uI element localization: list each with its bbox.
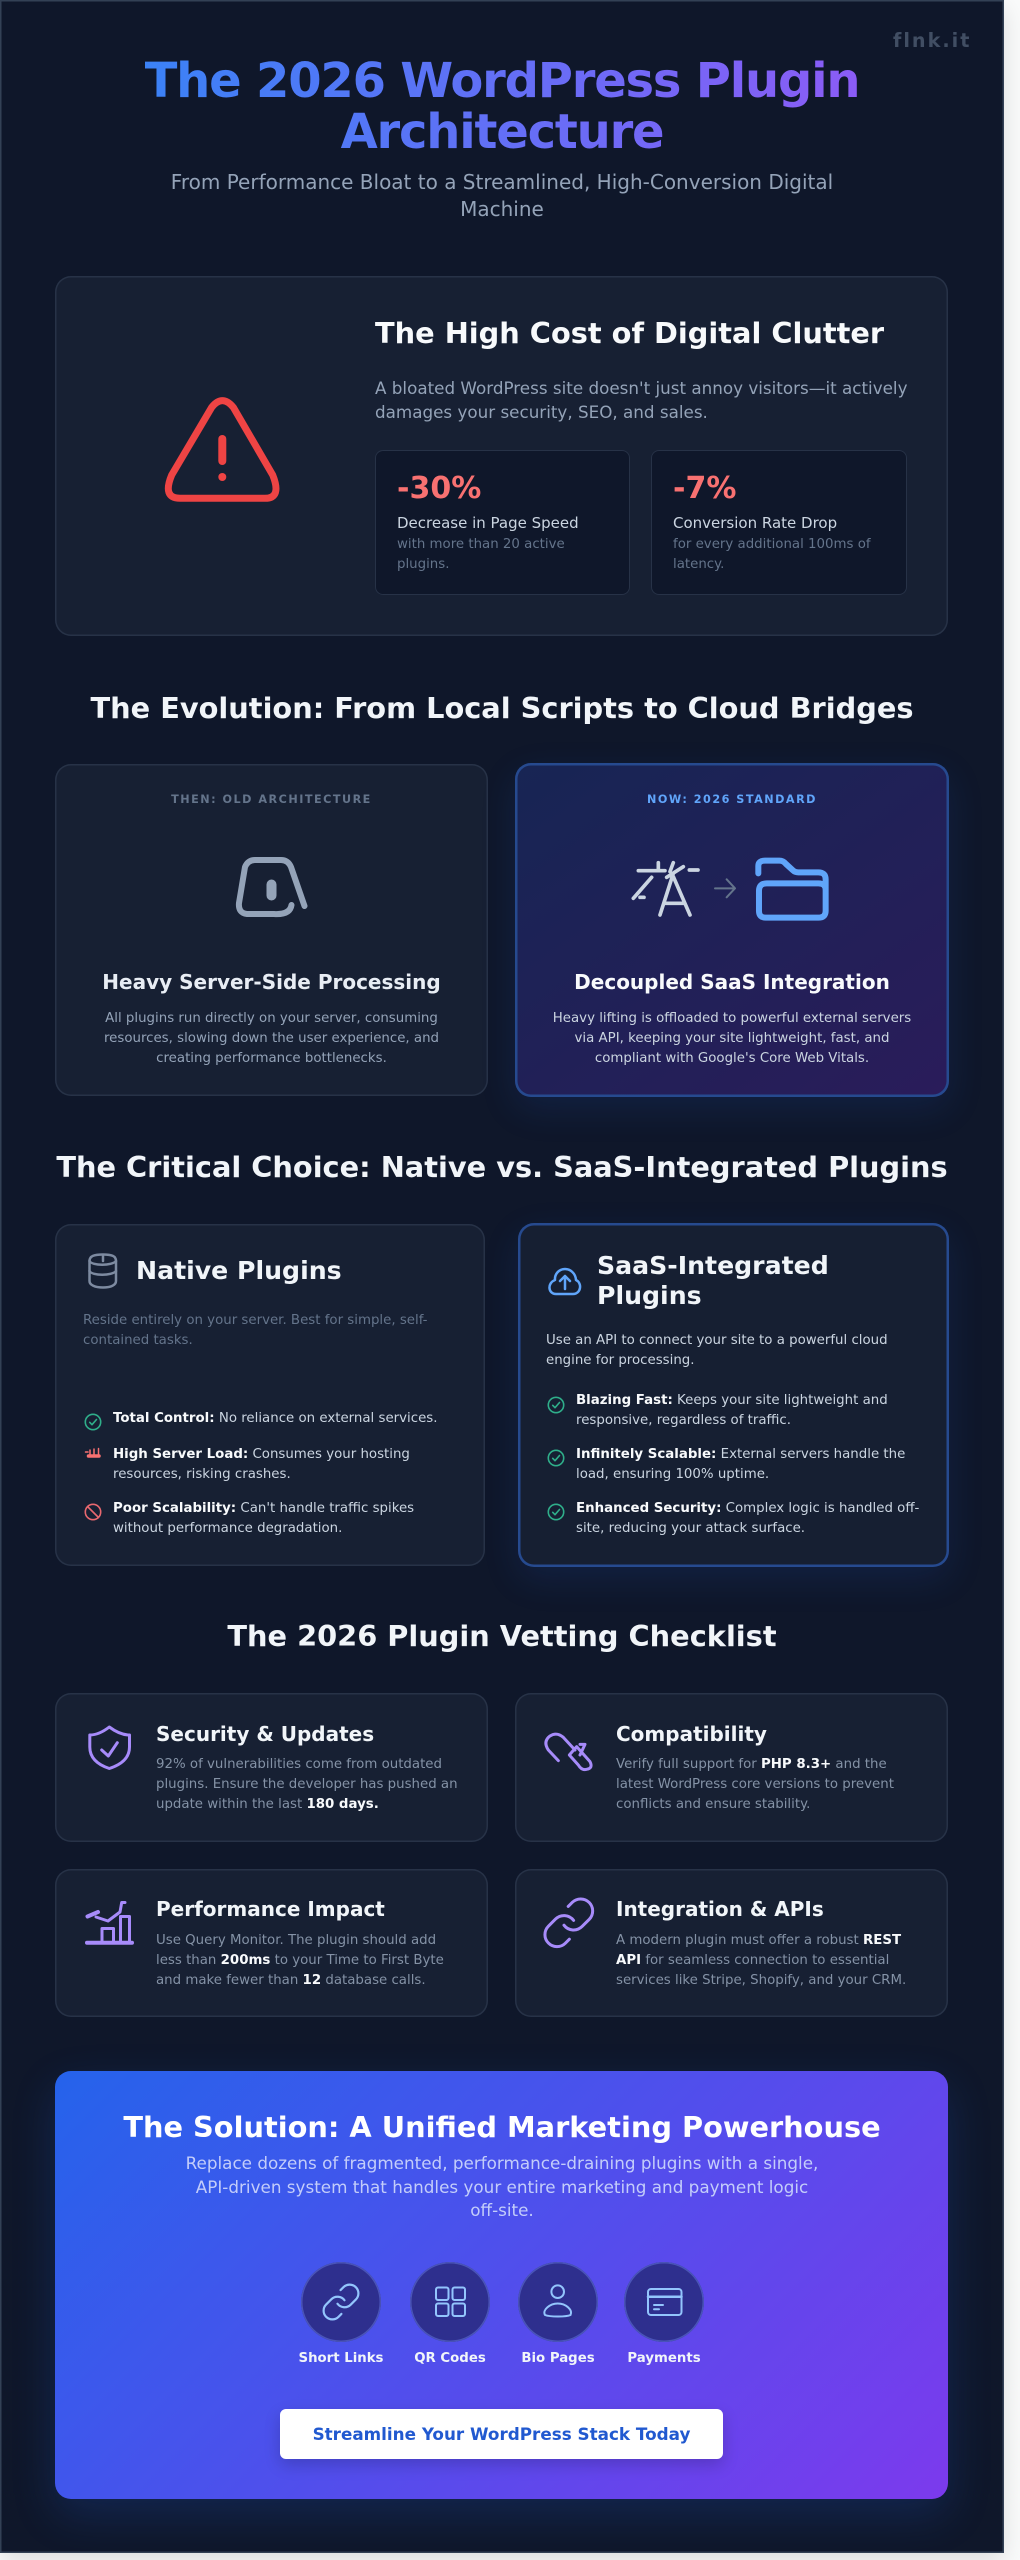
card title: Security & Updates bbox=[156, 1722, 374, 1746]
button: call to action: Streamline Your WordPress Stack Today bbox=[313, 2424, 690, 2444]
icon: server load bbox=[84, 1448, 101, 1458]
card title: Native Plugins bbox=[136, 1256, 342, 1285]
card text: API for seamless connection to essential bbox=[616, 1952, 889, 1968]
icon: check bbox=[84, 1414, 102, 1430]
text: solution: Replace dozens of fragmented, performance-draining plugins with a single, bbox=[186, 2153, 818, 2173]
title bbox=[145, 53, 859, 160]
panel: security and updates bbox=[55, 1693, 488, 1842]
panel: integration and apis bbox=[515, 1869, 948, 2017]
card title: Plugins bbox=[597, 1281, 702, 1310]
feature: bio pages bbox=[518, 2262, 598, 2366]
benefit: blazing fast: Blazing Fast: Keeps your site lightweight and bbox=[576, 1393, 888, 1408]
card text: latest WordPress core versions to prevent bbox=[616, 1776, 894, 1792]
drawback: server load bbox=[113, 1447, 410, 1482]
title: Architecture bbox=[341, 104, 663, 160]
stat note bbox=[397, 537, 565, 572]
heading: evolution: The Evolution: From Local Scripts to Cloud Bridges bbox=[90, 691, 914, 725]
icon: database bbox=[88, 1253, 118, 1289]
label: then: THEN: OLD ARCHITECTURE bbox=[171, 793, 372, 806]
icon: link bbox=[301, 2262, 381, 2342]
text: intro: damages your security, SEO, and sales. bbox=[375, 402, 708, 422]
icon: bar chart bbox=[85, 1901, 134, 1945]
label: Bio Pages bbox=[521, 2351, 595, 2366]
card text: All plugins run directly on your server, consuming bbox=[105, 1011, 438, 1026]
stat note: for every additional 100ms of bbox=[673, 537, 871, 552]
icon: cloud upload bbox=[548, 1268, 582, 1296]
panel: then bbox=[55, 764, 488, 1096]
label: Short Links bbox=[298, 2351, 383, 2366]
card text: resources, slowing down the user experience, and bbox=[104, 1031, 439, 1046]
card title: Integration & APIs bbox=[616, 1897, 824, 1921]
card text bbox=[616, 1756, 894, 1812]
card text bbox=[156, 1932, 444, 1988]
card title bbox=[597, 1251, 829, 1310]
text: intro: A bloated WordPress site doesn't just annoy visitors—it actively bbox=[375, 378, 908, 398]
card text: services like Stripe, Shopify, and your CRM. bbox=[616, 1972, 906, 1988]
watermark: flnk.it bbox=[893, 29, 971, 52]
card text: contained tasks. bbox=[83, 1333, 193, 1348]
icon: shield bbox=[88, 1726, 131, 1770]
card text: update within the last 180 days. bbox=[156, 1796, 379, 1812]
panel: native plugins bbox=[55, 1224, 485, 1566]
heading: critical choice: The Critical Choice: Native vs. SaaS-Integrated Plugins bbox=[56, 1150, 948, 1184]
subtitle bbox=[171, 170, 833, 220]
panel: performance impact bbox=[55, 1869, 488, 2017]
drawback: server load: resources, risking crashes. bbox=[113, 1467, 291, 1482]
card title: Compatibility bbox=[616, 1722, 767, 1746]
stat value: -7% bbox=[673, 471, 736, 506]
card text: plugins. Ensure the developer has pushed an bbox=[156, 1776, 458, 1792]
icon: ban bbox=[84, 1504, 102, 1520]
button: call to action bbox=[280, 2409, 723, 2459]
heading: checklist: The 2026 Plugin Vetting Checklist bbox=[227, 1619, 777, 1653]
heading: solution: The Solution: A Unified Marketing Powerhouse bbox=[123, 2110, 881, 2144]
card text: Verify full support for PHP 8.3+ and the bbox=[616, 1756, 887, 1772]
card title: SaaS-Integrated bbox=[597, 1251, 829, 1280]
stat value: -30% bbox=[397, 471, 481, 506]
stat note: latency. bbox=[673, 557, 724, 572]
drawback: scalability bbox=[113, 1500, 414, 1536]
card text bbox=[546, 1333, 888, 1368]
label: QR Codes bbox=[414, 2351, 486, 2366]
card text: engine for processing. bbox=[546, 1353, 694, 1368]
stat label: Decrease in Page Speed bbox=[397, 514, 579, 532]
text: solution bbox=[186, 2153, 818, 2220]
card title: Performance Impact bbox=[156, 1897, 385, 1921]
card text bbox=[553, 1011, 911, 1066]
card text: Use an API to connect your site to a powerful cloud bbox=[546, 1333, 888, 1348]
benefit: scalable: Infinitely Scalable: External servers handle the bbox=[576, 1447, 905, 1462]
stat: conversion rate bbox=[651, 450, 907, 595]
drawback: scalability: Poor Scalability: Can't handle traffic spikes bbox=[113, 1500, 414, 1516]
card text: compliant with Google's Core Web Vitals. bbox=[595, 1051, 869, 1066]
stat label: Conversion Rate Drop bbox=[673, 514, 837, 532]
text: intro bbox=[375, 378, 908, 422]
stat note bbox=[673, 537, 871, 572]
card text: and make fewer than 12 database calls. bbox=[156, 1972, 426, 1988]
panel: now bbox=[515, 763, 949, 1097]
benefit: scalable bbox=[576, 1447, 905, 1482]
drawback: scalability: without performance degradation. bbox=[113, 1520, 342, 1536]
subtitle: From Performance Bloat to a Streamlined, High-Conversion Digital bbox=[171, 170, 833, 194]
icon: tower, arrow and folder bbox=[631, 858, 829, 921]
title: The 2026 WordPress Plugin bbox=[145, 53, 859, 109]
card title: Heavy Server-Side Processing bbox=[102, 970, 441, 994]
icon: chain link bbox=[543, 1898, 594, 1948]
label: Payments bbox=[627, 2351, 701, 2366]
card text bbox=[156, 1756, 458, 1812]
subtitle: Machine bbox=[460, 196, 544, 220]
card text: A modern plugin must offer a robust REST bbox=[616, 1932, 901, 1948]
stat: page speed bbox=[375, 450, 630, 595]
card text bbox=[83, 1313, 427, 1348]
icon: check bbox=[548, 1396, 564, 1520]
feature: qr codes bbox=[410, 2262, 490, 2366]
panel: solution bbox=[55, 2071, 948, 2499]
benefit: security: Enhanced Security: Complex logic is handled off- bbox=[576, 1500, 919, 1516]
benefit: security bbox=[576, 1500, 919, 1536]
panel: saas plugins bbox=[518, 1223, 949, 1567]
card title: Decoupled SaaS Integration bbox=[574, 970, 890, 994]
text: solution: API-driven system that handles your entire marketing and payment logic bbox=[196, 2176, 808, 2196]
icon: qr grid bbox=[410, 2262, 490, 2342]
feature: short links bbox=[298, 2262, 383, 2366]
benefit: security: site, reducing your attack surface. bbox=[576, 1520, 805, 1536]
text: solution: off-site. bbox=[470, 2200, 534, 2220]
heading: high cost: The High Cost of Digital Clutter bbox=[375, 316, 884, 350]
card text: Heavy lifting is offloaded to powerful external servers bbox=[553, 1011, 911, 1026]
icon: broken link bbox=[544, 1732, 593, 1772]
benefit: blazing fast bbox=[576, 1393, 888, 1428]
feature: payments bbox=[624, 2262, 704, 2366]
card text: Use Query Monitor. The plugin should add bbox=[156, 1932, 436, 1948]
icon: server drive bbox=[236, 857, 308, 918]
panel: high cost of digital clutter bbox=[55, 276, 948, 636]
drawback: server load: High Server Load: Consumes your hosting bbox=[113, 1447, 410, 1462]
card text: 92% of vulnerabilities come from outdated bbox=[156, 1756, 442, 1772]
card text: less than 200ms to your Time to First Byte bbox=[156, 1952, 444, 1968]
benefit: blazing fast: responsive, regardless of traffic. bbox=[576, 1413, 791, 1428]
panel: compatibility bbox=[515, 1693, 948, 1842]
card text: conflicts and ensure stability. bbox=[616, 1796, 810, 1812]
stat note: plugins. bbox=[397, 557, 449, 572]
card text: Reside entirely on your server. Best for simple, self- bbox=[83, 1313, 427, 1328]
card text bbox=[104, 1011, 439, 1066]
card text bbox=[616, 1932, 906, 1988]
icon: warning triangle bbox=[164, 397, 280, 502]
icon: person bbox=[518, 2262, 598, 2342]
card text: creating performance bottlenecks. bbox=[156, 1051, 387, 1066]
card text: via API, keeping your site lightweight, fast, and bbox=[575, 1031, 889, 1046]
benefit: scalable: load, ensuring 100% uptime. bbox=[576, 1467, 769, 1482]
stat note: with more than 20 active bbox=[397, 537, 565, 552]
icon: card bbox=[624, 2262, 704, 2342]
benefit: total control: Total Control: No reliance on external services. bbox=[113, 1410, 437, 1426]
label: now: NOW: 2026 STANDARD bbox=[647, 793, 817, 806]
